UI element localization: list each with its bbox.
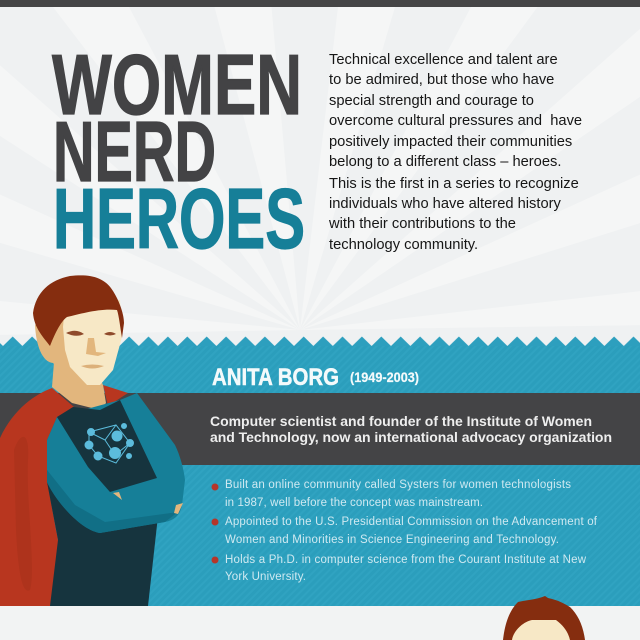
- name heading: (1949-2003): [350, 370, 419, 385]
- bullet 3: York University.: [225, 571, 306, 583]
- intro paragraph: This is the first in a series to recognize: [329, 176, 579, 192]
- dark band: [0, 393, 640, 465]
- dark body: [47, 480, 160, 606]
- intro paragraph: belong to a different class – heroes.: [329, 154, 561, 170]
- shirt network icon: [85, 424, 134, 463]
- title: [52, 38, 305, 267]
- head: [33, 275, 124, 386]
- subtitle: and Technology, now an international advocacy organization: [210, 429, 612, 445]
- next figure: head peeking at bottom: [503, 596, 585, 640]
- intro paragraph: technology community.: [329, 237, 478, 253]
- hair: [33, 275, 124, 346]
- intro paragraph: special strength and courage to: [329, 93, 534, 109]
- bullet 2: Women and Minorities in Science Engineering and Technology.: [225, 534, 559, 546]
- bullet list: [212, 479, 598, 583]
- bullet 2: [212, 516, 598, 546]
- subtitle: Computer scientist and founder of the Institute of Women: [210, 413, 592, 429]
- bullet 3: [212, 554, 587, 583]
- figure: Anita Borg illustration: [0, 275, 185, 606]
- title: WOMEN: [52, 38, 302, 133]
- bullet 2: Appointed to the U.S. Presidential Commission on the Advancement of: [225, 516, 598, 528]
- bullet 1: [212, 479, 571, 509]
- teal zigzag band: [0, 336, 640, 394]
- shirt: [57, 400, 157, 492]
- intro paragraph: positively impacted their communities: [329, 134, 572, 150]
- top dark bar: [0, 0, 640, 7]
- bullet 1: Built an online community called Systers for women technologists: [225, 479, 571, 491]
- hands: [113, 492, 183, 514]
- intro paragraph: Technical excellence and talent are: [329, 52, 558, 68]
- intro paragraph: [328, 52, 582, 253]
- intro paragraph: individuals who have altered history: [329, 196, 562, 212]
- eyes and mouth: [66, 331, 116, 336]
- subtitle: [210, 413, 612, 445]
- bullet 3: Holds a Ph.D. in computer science from the Courant Institute at New: [225, 554, 587, 566]
- intro paragraph: overcome cultural pressures and have: [329, 113, 582, 129]
- title: HEROES: [53, 172, 305, 267]
- bullet 1: in 1987, well before the concept was mainstream.: [225, 497, 483, 509]
- name heading: ANITA BORG: [212, 364, 339, 391]
- intro paragraph: with their contributions to the: [328, 216, 516, 232]
- arms and collar: [47, 393, 185, 533]
- title: NERD: [53, 105, 216, 200]
- cape: [0, 388, 74, 606]
- neck: [52, 362, 106, 410]
- intro paragraph: to be admired, but those who have: [329, 72, 554, 88]
- cape collar: [103, 385, 128, 406]
- lower teal panel: [0, 465, 640, 606]
